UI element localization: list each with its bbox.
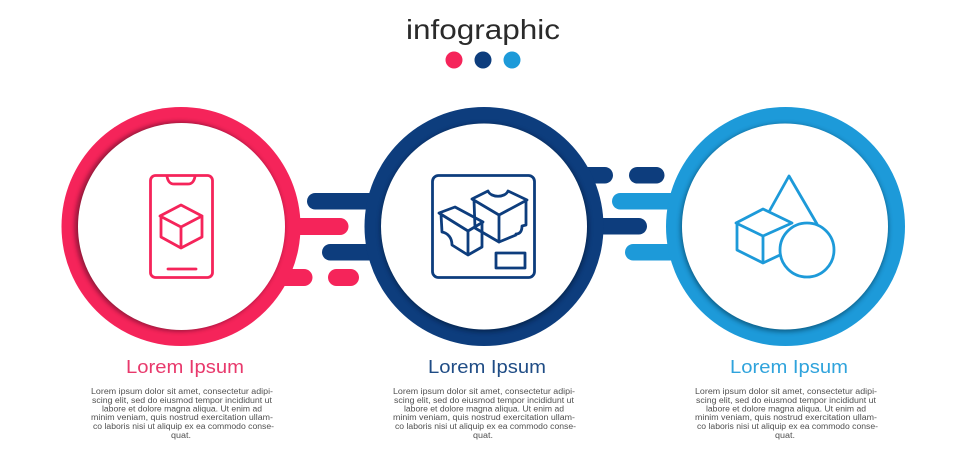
body: light blue: minim veniam, quis nostrud exercitation ullam- <box>695 413 877 422</box>
heading: light blue: Lorem Ipsum <box>730 357 848 377</box>
panel: light blue circle <box>666 107 905 346</box>
body: red: quat. <box>171 431 191 440</box>
body: navy: scing elit, sed do eiusmod tempor incididunt ut <box>394 396 575 405</box>
body: red: Lorem ipsum dolor sit amet, consectetur adipi- <box>91 387 273 396</box>
body: light blue: co laboris nisi ut aliquip ex ea commodo conse- <box>697 422 878 431</box>
text block: navy column <box>393 357 576 440</box>
body: navy: Lorem ipsum dolor sit amet, consectetur adipi- <box>393 387 575 396</box>
body: light blue: Lorem ipsum dolor sit amet, consectetur adipi- <box>695 387 877 396</box>
text block: light blue column <box>695 357 878 440</box>
connector bars: navy <box>307 167 664 260</box>
body: light blue: quat. <box>775 431 795 440</box>
body: red: scing elit, sed do eiusmod tempor incididunt ut <box>92 396 273 405</box>
body: light blue <box>695 387 878 440</box>
legend dots <box>446 52 520 68</box>
icon: boxes with t-shirt print <box>432 176 534 278</box>
body: navy: minim veniam, quis nostrud exercitation ullam- <box>393 413 575 422</box>
icon: phone with cube <box>150 176 212 278</box>
heading: navy: Lorem Ipsum <box>428 357 546 377</box>
icon: cube, cone and sphere <box>736 176 834 277</box>
panel: navy circle <box>364 107 604 346</box>
title: infographic <box>406 14 560 45</box>
body: red <box>91 387 274 440</box>
body: navy: labore et dolore magna aliqua. Ut enim ad <box>404 404 564 414</box>
body: navy: quat. <box>473 431 493 440</box>
body: light blue: scing elit, sed do eiusmod tempor incididunt ut <box>696 396 877 405</box>
body: red: labore et dolore magna aliqua. Ut enim ad <box>102 404 262 414</box>
body: light blue: labore et dolore magna aliqua. Ut enim ad <box>706 404 866 414</box>
body: navy <box>393 387 576 440</box>
connector bars: red <box>270 218 359 286</box>
body: red: minim veniam, quis nostrud exercitation ullam- <box>91 413 273 422</box>
text block: red column <box>91 357 274 440</box>
heading: red: Lorem Ipsum <box>126 357 244 377</box>
body: navy: co laboris nisi ut aliquip ex ea commodo conse- <box>395 422 576 431</box>
panel: red circle <box>62 107 300 346</box>
body: red: co laboris nisi ut aliquip ex ea commodo conse- <box>93 422 274 431</box>
connector bars: light blue <box>612 193 695 260</box>
